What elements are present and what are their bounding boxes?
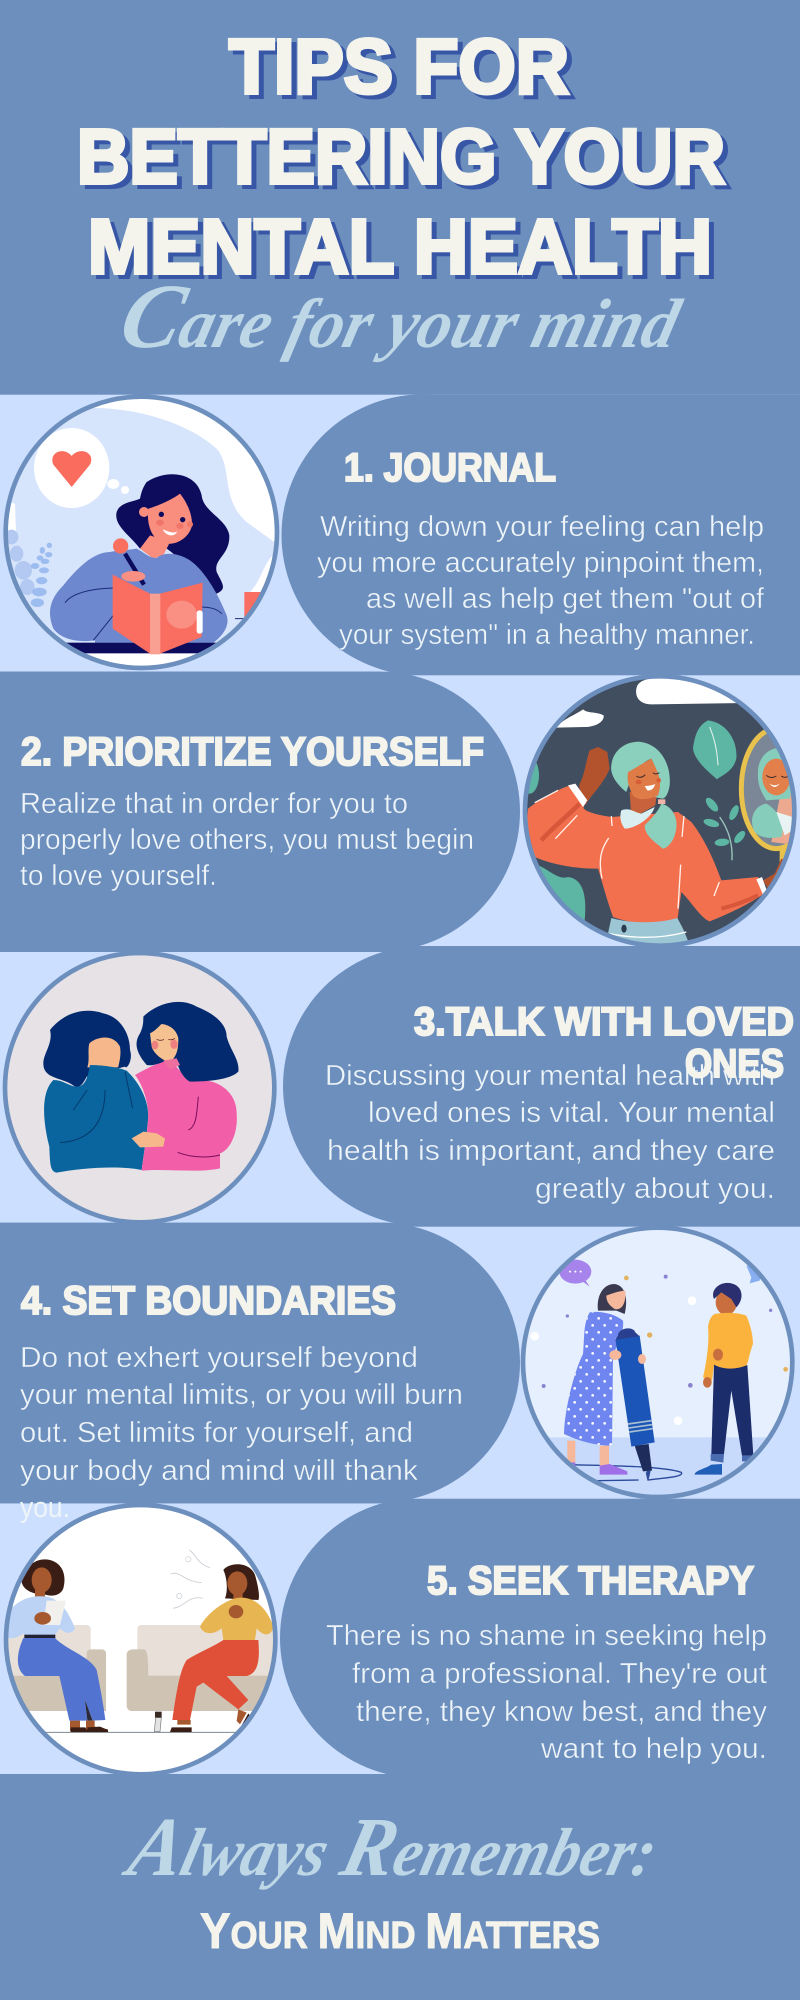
illustration: therapy session <box>0 1500 284 1776</box>
text: prioritize yourself body: Realize that in order for you to <box>20 788 408 820</box>
footer heading: your mind matters: YOUR MIND MATTERS <box>200 1903 600 1959</box>
illustration: woman journaling <box>0 392 284 676</box>
text: journal body: your system" in a healthy manner. <box>339 619 755 651</box>
illustration: woman at mirror <box>518 672 800 954</box>
panel: seek therapy <box>0 1498 800 1778</box>
text: set boundaries body: your mental limits, or you will burn <box>20 1379 463 1411</box>
text: journal body: as well as help get them "out of <box>366 583 765 615</box>
text: seek therapy body <box>326 1620 768 1765</box>
footer script: always remember: Always Remember: <box>116 1801 668 1894</box>
text: journal body: you more accurately pinpoint them, <box>317 547 764 579</box>
text: set boundaries body: you. <box>20 1492 70 1524</box>
text: talk with loved ones body: greatly about you. <box>535 1173 775 1205</box>
text: prioritize yourself body: properly love others, you must begin <box>20 824 474 856</box>
text: seek therapy body: there, they know best, and they <box>356 1696 768 1728</box>
text: set boundaries body: out. Set limits for yourself, and <box>20 1417 413 1449</box>
text: talk with loved ones body: Discussing your mental health with <box>325 1060 775 1092</box>
text: set boundaries body: Do not exhert yourself beyond <box>20 1342 418 1374</box>
heading: journal: 1. JOURNAL <box>344 446 556 490</box>
title <box>77 24 725 290</box>
text: seek therapy body: There is no shame in seeking help <box>326 1620 767 1652</box>
heading: talk with loved ones: ONES <box>685 1042 784 1086</box>
text: journal body <box>317 511 765 651</box>
panel: journal <box>0 392 800 676</box>
heading: talk with loved ones: 3.TALK WITH LOVED <box>414 1000 794 1044</box>
heading: talk with loved ones <box>414 1000 794 1086</box>
illustration: two women comforting <box>0 950 284 1226</box>
panel: talk with loved ones <box>0 946 800 1227</box>
text: seek therapy body: want to help you. <box>540 1733 767 1765</box>
text: prioritize yourself body <box>20 788 474 892</box>
text: prioritize yourself body: to love yourself. <box>20 860 217 892</box>
text: set boundaries body: your body and mind will thank <box>20 1455 419 1487</box>
heading: prioritize yourself: 2. PRIORITIZE YOURSELF <box>21 730 484 774</box>
text: seek therapy body: from a professional. They're out <box>352 1658 767 1690</box>
subtitle: care for your mind: Care for your mind <box>111 266 694 368</box>
heading: seek therapy: 5. SEEK THERAPY <box>427 1559 754 1603</box>
text: talk with loved ones body: health is important, and they care <box>327 1135 775 1167</box>
text: talk with loved ones body: loved ones is vital. Your mental <box>368 1097 775 1129</box>
title: TIPS FOR <box>229 24 569 110</box>
panel: set boundaries <box>0 1222 800 1524</box>
panel: prioritize yourself <box>0 672 800 954</box>
illustration: people with giant marker <box>518 1224 800 1502</box>
title: BETTERING YOUR <box>77 114 725 200</box>
title: MENTAL HEALTH <box>88 204 712 290</box>
text: journal body: Writing down your feeling can help <box>320 511 764 543</box>
text: talk with loved ones body <box>325 1060 775 1205</box>
text: set boundaries body <box>20 1342 463 1524</box>
heading: set boundaries: 4. SET BOUNDARIES <box>21 1279 396 1323</box>
